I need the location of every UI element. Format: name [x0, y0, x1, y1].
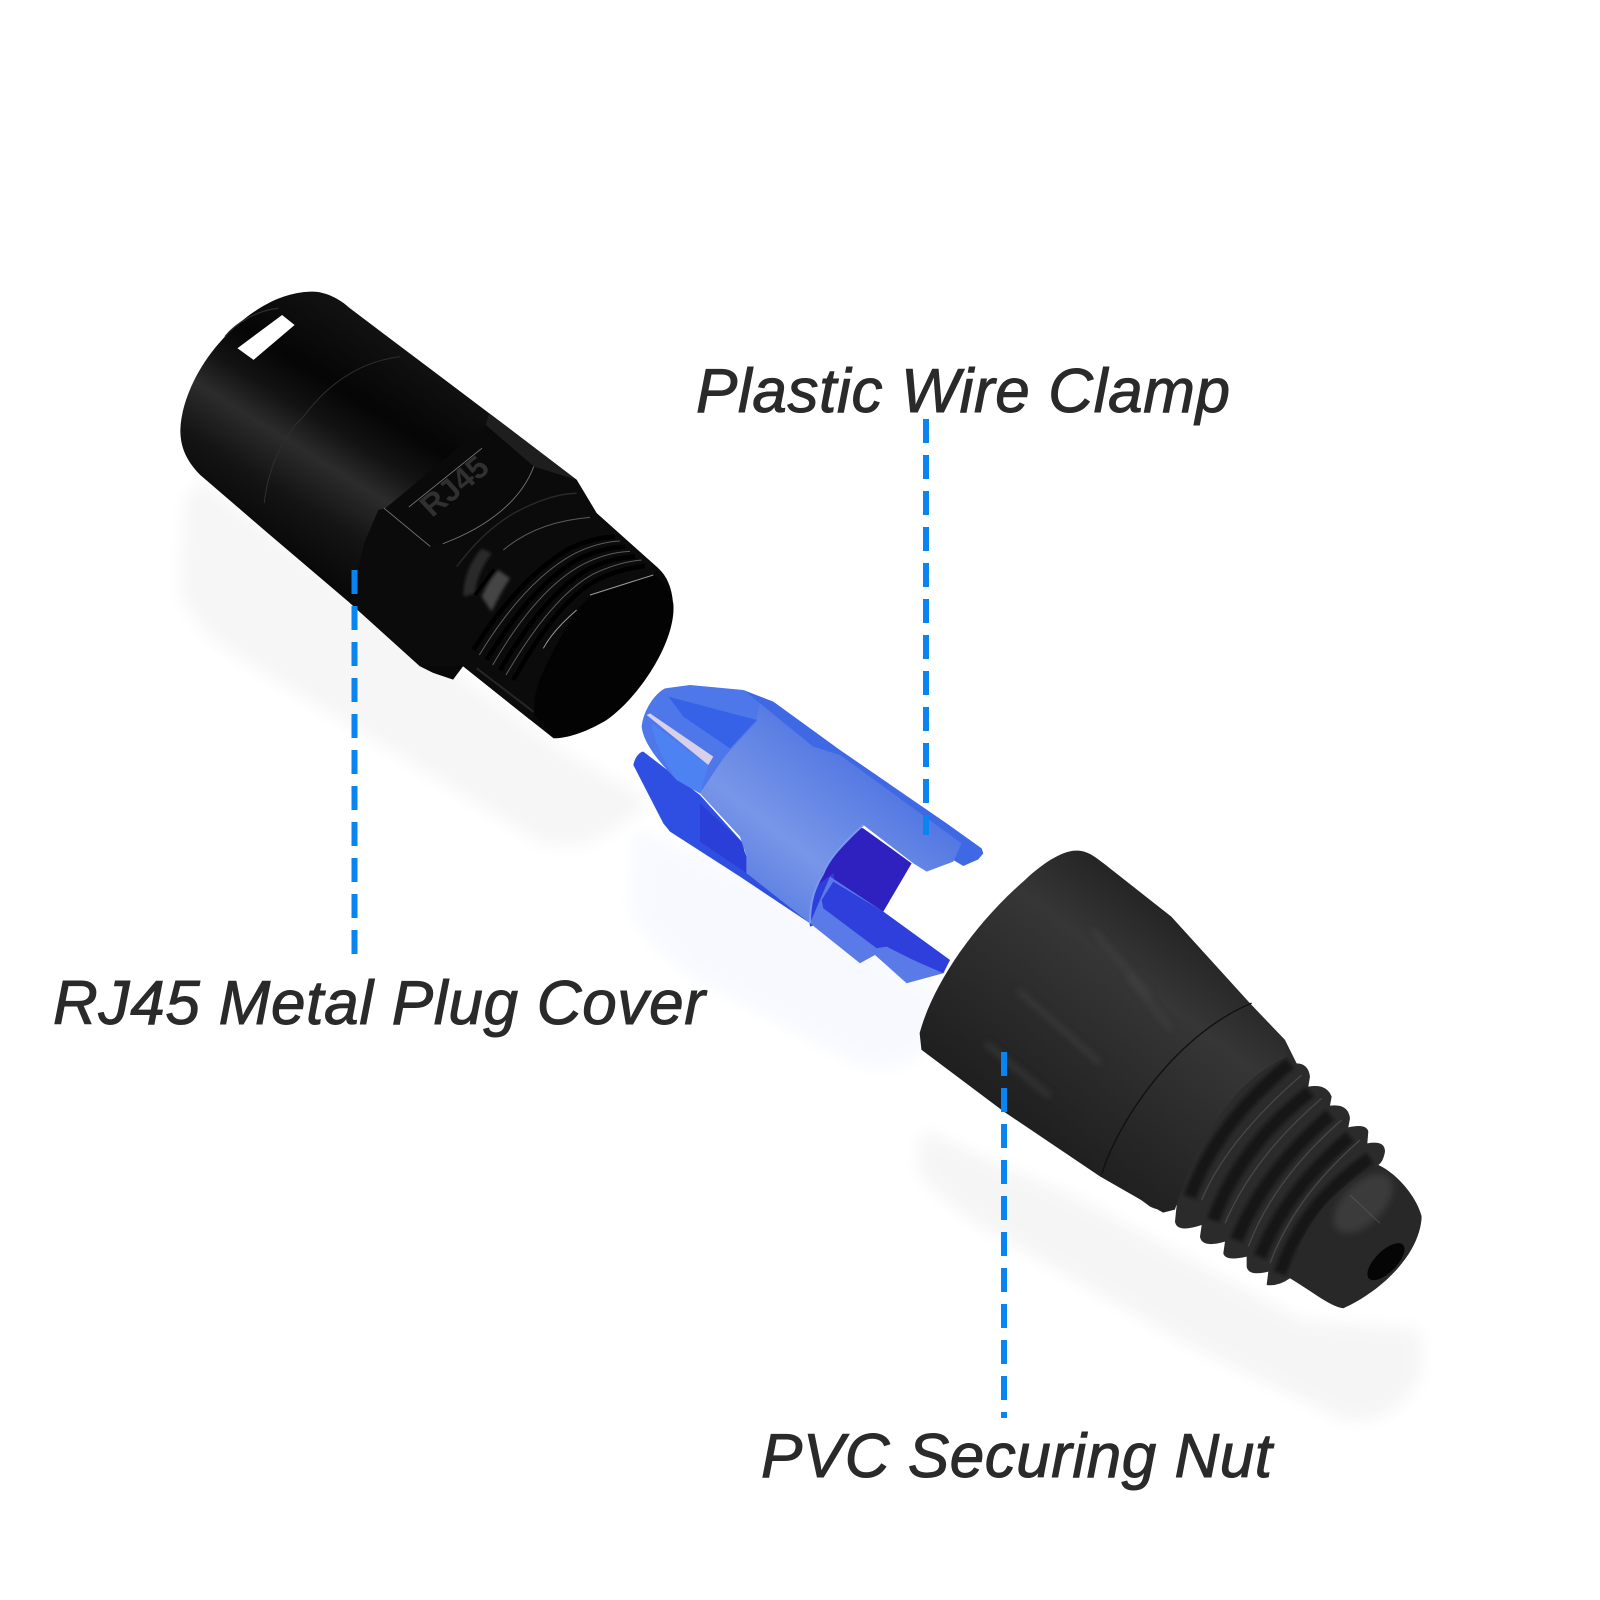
slot — [237, 315, 295, 360]
nut reflection — [918, 1130, 1422, 1420]
label: plastic wire clamp: Plastic Wire Clamp — [696, 357, 1230, 426]
thread and opening — [457, 493, 674, 738]
leader line: metal plug cover — [352, 570, 358, 954]
icon: plastic wire clamp — [633, 685, 983, 983]
plug reflection — [180, 480, 650, 846]
embossed RJ45 text: RJ45 — [412, 449, 496, 523]
nut cone — [920, 851, 1287, 1213]
clamp reflection — [632, 830, 950, 1067]
label: RJ45 metal plug cover: RJ45 Metal Plug Cover — [53, 969, 707, 1038]
icon: RJ45 metal plug cover — [180, 292, 674, 738]
label: PVC securing nut: PVC Securing Nut — [761, 1422, 1275, 1491]
cable hole — [1361, 1237, 1410, 1286]
boot ribs and tip — [1130, 1040, 1422, 1308]
leader line: securing nut — [1001, 1052, 1007, 1418]
icon: PVC securing nut — [920, 851, 1422, 1308]
leader line: wire clamp — [923, 419, 929, 835]
